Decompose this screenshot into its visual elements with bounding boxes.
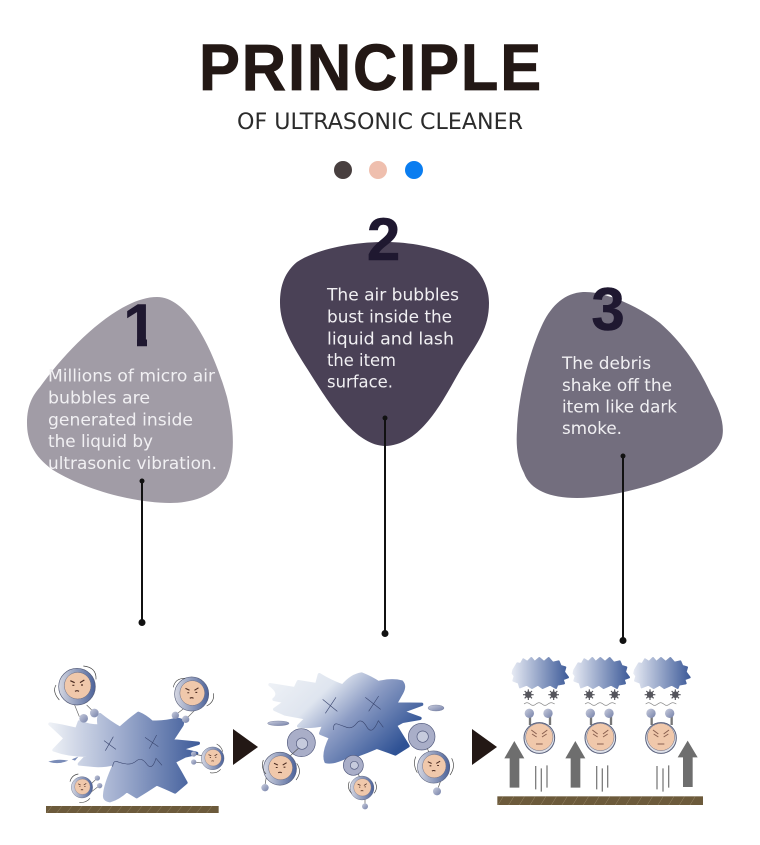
debris cloud group right — [634, 658, 690, 753]
illustration: debris shaken off — [497, 658, 703, 805]
burst bubble middle — [343, 755, 376, 809]
arrow: step 1 to step 2 — [233, 729, 258, 765]
step 1 number: 1 — [123, 292, 157, 359]
bubble character top left — [55, 666, 99, 723]
ground — [497, 796, 703, 805]
floating debris — [268, 721, 289, 726]
step 3 description: The debris — [561, 354, 651, 373]
connector line: step 1 — [138, 478, 146, 626]
bubble character top right — [172, 677, 214, 723]
step 3 number: 3 — [591, 276, 625, 343]
step 3 description: smoke. — [562, 419, 622, 438]
illustration: bubbles burst on dirt — [261, 674, 453, 809]
step 2 description: liquid and lash — [327, 330, 454, 348]
dirt face — [323, 696, 383, 730]
step 2 description: the item — [327, 351, 396, 370]
step 2 description: surface. — [327, 372, 393, 392]
step 2 description: bust inside the — [327, 308, 452, 326]
step 1 description — [48, 366, 217, 473]
step 1 description: the liquid by — [48, 432, 153, 451]
step 3 description: item like dark — [562, 398, 677, 416]
upward arrows — [504, 741, 698, 788]
arrow: step 2 to step 3 — [472, 729, 497, 765]
burst bubble right — [408, 723, 453, 795]
dirt splat — [270, 674, 422, 762]
subtitle: OF ULTRASONIC CLEANER — [237, 110, 523, 135]
dirt face — [104, 735, 162, 767]
step 2 description: The air bubbles — [326, 286, 459, 304]
step 1 description: generated inside — [48, 410, 193, 430]
step 2 number: 2 — [367, 206, 400, 273]
connector line: step 3 — [620, 454, 626, 644]
decorative colour dots — [334, 161, 423, 179]
step 2 description — [326, 286, 459, 392]
step 1 description: Millions of micro air — [48, 366, 215, 386]
step 1 description: bubbles are — [48, 388, 150, 408]
panel: step 2 bubble — [280, 206, 489, 446]
ground — [46, 806, 219, 813]
bubble character right — [191, 744, 224, 773]
step 1 description: ultrasonic vibration. — [48, 454, 217, 473]
connector line: step 2 — [382, 416, 388, 637]
burst bubble left — [261, 729, 315, 791]
step 3 description — [561, 354, 677, 438]
vertical motion lines — [536, 765, 669, 792]
panel: step 1 bubble — [27, 292, 233, 503]
debris cloud group left — [513, 658, 568, 753]
dirt splat — [50, 713, 198, 801]
panel: step 3 bubble — [517, 276, 723, 498]
step 3 description: shake off the — [562, 376, 672, 395]
illustration: bubbles attack dirt — [46, 666, 224, 813]
debris cloud group middle — [574, 658, 629, 753]
bubble character lower left — [70, 774, 102, 803]
title: PRINCIPLE — [199, 30, 543, 104]
